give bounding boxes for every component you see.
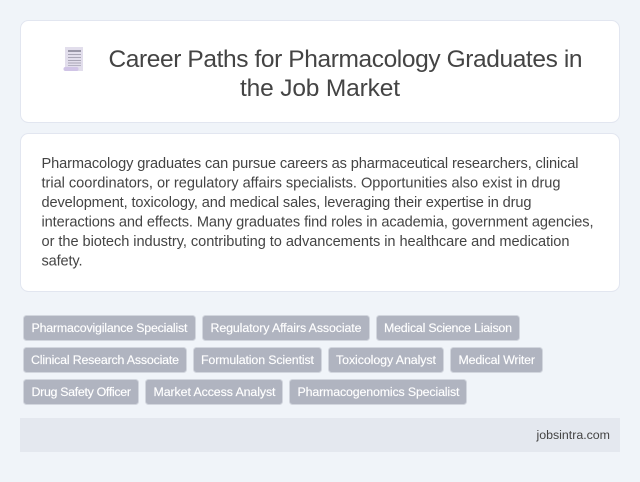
tag: Formulation Scientist [194, 348, 322, 372]
text block: description: safety. [42, 254, 82, 270]
text block: description [42, 156, 594, 270]
footer source text: jobsintra.com [536, 428, 610, 442]
tag: Drug Safety Officer: Drug Safety Officer [32, 385, 131, 399]
tag: Medical Science Liaison [376, 316, 520, 340]
title: the Job Market [240, 75, 400, 102]
tag: Clinical Research Associate: Clinical Research Associate [31, 353, 179, 367]
career tags [24, 316, 542, 404]
tag: Regulatory Affairs Associate: Regulatory Affairs Associate [210, 321, 362, 335]
tag: Medical Writer [450, 348, 542, 372]
text block: description: Pharmacology graduates can pursue careers as pharmaceutical researchers, clinical [42, 156, 578, 172]
text block: description: interactions and effects. Many graduates find roles in academia, government agencies, [42, 214, 594, 230]
tag: Market Access Analyst [146, 380, 282, 404]
tag: Regulatory Affairs Associate [202, 316, 370, 340]
text block: description: or the biotech industry, contributing to advancements in healthcare and medication [42, 234, 570, 250]
tag: Formulation Scientist: Formulation Scientist [201, 353, 315, 367]
title [108, 46, 582, 102]
icon: document scroll [64, 47, 83, 71]
footer [20, 418, 620, 452]
panel: description [20, 134, 620, 292]
panel: header [20, 20, 620, 122]
title: Career Paths for Pharmacology Graduates in [108, 46, 582, 73]
tag: Pharmacogenomics Specialist: Pharmacogenomics Specialist [298, 385, 460, 399]
text block: description: trial coordinators, or regulatory affairs specialists. Opportunities also exist in drug [42, 176, 560, 192]
text block: description: development, toxicology, and medical sales, leveraging their expertise in drug [42, 195, 532, 211]
tag: Medical Science Liaison: Medical Science Liaison [384, 321, 512, 335]
tag: Toxicology Analyst [328, 348, 444, 372]
tag: Clinical Research Associate [24, 348, 186, 372]
tag: Medical Writer: Medical Writer [458, 353, 535, 367]
tag: Toxicology Analyst: Toxicology Analyst [336, 353, 437, 367]
tag: Pharmacovigilance Specialist [24, 316, 196, 340]
tag: Drug Safety Officer [24, 380, 138, 404]
tag: Market Access Analyst: Market Access Analyst [154, 385, 276, 399]
tag: Pharmacogenomics Specialist [290, 380, 466, 404]
tag: Pharmacovigilance Specialist: Pharmacovigilance Specialist [32, 321, 188, 335]
